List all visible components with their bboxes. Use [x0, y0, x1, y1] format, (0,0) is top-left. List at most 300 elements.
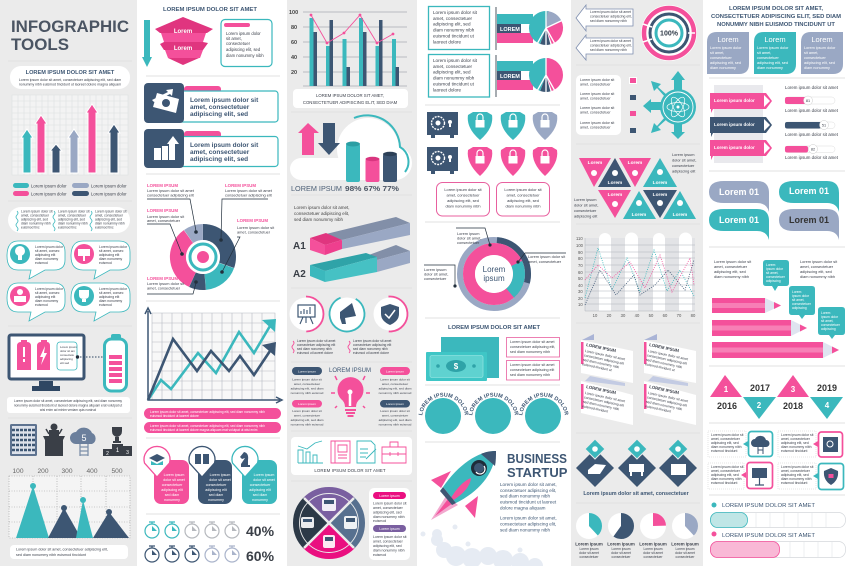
tilted card four: Lorem ipsum dolor sit amet — [648, 391, 688, 403]
triangle chart: 200 — [37, 468, 49, 475]
text block: pencils left: Lorem ipsum dolor sit — [714, 259, 752, 264]
panel: transport legend: euismod — [373, 519, 386, 523]
card: lavender one: sit amet, — [710, 51, 724, 55]
tilted card three: euismod tincidunt — [582, 404, 608, 414]
donut label: top left: consectetuer adipiscing elit — [147, 192, 195, 198]
text box with teal border two — [428, 54, 490, 97]
pencil three — [712, 342, 839, 358]
icon note: cloud: euismod tincidunt — [711, 449, 737, 453]
panel: transport legend: Lorem ipsum — [379, 527, 400, 531]
text block: pencils left: adipiscing elit, sed — [714, 269, 746, 274]
text block: startup copy: euismod tincidunt ut laoreet — [500, 500, 557, 504]
triangle chart: 500 — [111, 468, 123, 475]
card: teal — [754, 32, 796, 74]
text block: triangle chart caption — [10, 545, 128, 559]
text box with teal border one: amet, consectetuer — [433, 16, 473, 21]
callouts around bulb: nonummy nibh euismod — [379, 391, 412, 395]
callouts around bulb: nonummy nibh euismod — [291, 422, 324, 426]
panel: atom list: Lorem ipsum dolor sit — [580, 92, 614, 96]
panel: transport legend: Lorem ipsum dolor sit — [373, 502, 406, 506]
pink note two: adipiscing elit, sed — [507, 198, 539, 203]
progress: teal: LOREM IPSUM DOLOR SIT AMET — [722, 503, 816, 509]
panel: transport legend — [369, 488, 410, 560]
tilted card one: LOREM IPSUM — [586, 342, 617, 353]
card: lavender one — [707, 32, 749, 74]
donut label: middle left: LOREM IPSUM — [147, 208, 178, 213]
tilted card two: sed diam nonummy nibh — [646, 358, 683, 369]
timeline: 2016 — [717, 401, 737, 411]
bubble: pink person: Lorem ipsum dolor — [35, 287, 64, 291]
dotted line chart: 110 — [576, 236, 583, 241]
dotted line chart: 40 — [578, 283, 583, 288]
bubble: pink person: diam nonummy — [35, 299, 58, 303]
chart legend: Lorem ipsum dolor — [91, 184, 127, 188]
card: lavender one: diam nonummy — [710, 66, 736, 70]
mini pie three: Lorem ipsum — [639, 542, 667, 546]
bar: A2: A2 — [293, 269, 306, 280]
card: lavender two: Lorem — [811, 35, 833, 44]
monitor with batteries — [9, 335, 84, 391]
callouts around bulb: Lorem ipsum — [298, 370, 316, 374]
ribbon arrows: Lorem ipsum dolor — [714, 122, 755, 127]
ring icon: shield — [371, 295, 409, 333]
dotted line chart: 80 — [578, 256, 583, 261]
bubble label three — [709, 209, 769, 240]
callouts around bulb: Lorem ipsum dolor sit — [380, 378, 410, 382]
icon note: shield: Lorem ipsum dolor sit — [781, 465, 813, 469]
tilted card four: sed diam nonummy nibh — [646, 400, 683, 411]
teal tooltip three: sit amet, — [821, 319, 834, 323]
pink note box two — [506, 360, 560, 380]
text block: startup copy: consectetuer adipiscing elit, — [500, 488, 556, 493]
arrow: navy down — [318, 123, 340, 155]
target 100 percent: 100% — [660, 30, 679, 38]
callouts around bulb: amet, consectetuer — [382, 382, 408, 386]
chart legend: Lorem ipsum dolor — [31, 192, 67, 196]
pin card: chess knight — [232, 446, 277, 504]
pin card: graduation: adipiscing elit — [161, 488, 183, 492]
icon note: cloud — [708, 431, 772, 457]
pin card: chess knight: consectetuer — [250, 483, 271, 487]
panel: oval notes: diam nonummy nibh — [58, 222, 88, 226]
timeline: 2018 — [783, 401, 803, 411]
callouts around bulb: nonummy nibh euismod — [291, 391, 324, 395]
text block: ring notes: Lorem ipsum dolor sit amet — [353, 339, 392, 343]
progress: pink: LOREM IPSUM DOLOR SIT AMET — [722, 533, 816, 539]
donut note: right — [528, 254, 566, 264]
pink note box one: consectetuer adipiscing elit, — [510, 345, 555, 349]
tilted card two: consectetuer adipiscing elit — [647, 353, 687, 366]
callouts around bulb: Lorem ipsum dolor sit — [292, 409, 322, 413]
text block: startup copy: sed diam nonummy nibh — [500, 528, 550, 532]
progress: pink — [710, 532, 846, 558]
cloud stats — [291, 184, 399, 193]
arrow note two: sed diam nonummy nibh — [590, 48, 627, 52]
stat: 60 percent: 60% — [246, 548, 275, 564]
callouts around bulb: amet, consectetuer — [382, 414, 408, 418]
circle with arc text three: LOREM IPSUM DOLOR — [518, 392, 568, 416]
bubble label two — [779, 181, 839, 212]
icon: briefcase — [382, 442, 406, 463]
pin card: chess knight: sed diam — [253, 493, 267, 497]
ribbon arrows: Lorem ipsum dolor — [714, 145, 755, 150]
progress bars: Lorem ipsum dolor sit amet — [785, 108, 839, 113]
dotted line chart: 30 — [578, 289, 583, 294]
donut label: bottom: LOREM IPSUM — [147, 276, 178, 281]
tilted card one — [581, 334, 633, 383]
text block: startup copy: Lorem ipsum dolor sit amet, — [500, 516, 557, 520]
ring icon: presentation — [288, 296, 324, 332]
shields row teal — [468, 112, 557, 140]
arrow note one: Lorem ipsum dolor sit amet — [590, 10, 631, 14]
bubble: pink board: sit amet, consec — [99, 249, 124, 253]
bubble label two: Lorem 01 — [789, 186, 829, 196]
circle with arc text one — [418, 392, 468, 434]
bubble label three: Lorem 01 — [719, 215, 759, 225]
text block: triangles left — [574, 197, 598, 218]
dotted line chart: 70 — [578, 263, 583, 268]
panel: atom list: amet, consectetuer — [580, 126, 611, 130]
text block: pencils left: amet, consectetuer — [714, 264, 748, 269]
callouts around bulb: Lorem ipsum dolor sit — [292, 378, 322, 382]
bubble: teal tree: Lorem ipsum dolor — [35, 245, 64, 249]
triangle mosaic: Lorem — [653, 192, 667, 198]
ribbon pie one — [496, 7, 563, 97]
heading: light bulb: LOREM IPSUM — [329, 368, 371, 374]
icon note: safe — [778, 431, 842, 457]
panel: oval notes: amet, consectetuer — [21, 214, 50, 218]
donut note: right: amet, consectetuer — [528, 259, 562, 264]
triangle mosaic: Lorem — [588, 160, 602, 166]
bubble label one — [709, 181, 769, 212]
text block: ring notes — [292, 339, 392, 355]
text box with teal border one: laoreet dolore — [433, 40, 462, 44]
text block: monitor caption: wisi enim ad minim veniam quis nostrud — [40, 408, 96, 412]
note box: sit amet, — [226, 36, 242, 41]
mini pie four: dolor sit amet — [675, 551, 695, 555]
callouts around bulb — [291, 367, 412, 426]
text block: A bars: Lorem ipsum dolor sit amet, — [294, 205, 350, 210]
donut label: top right: LOREM IPSUM — [225, 183, 256, 188]
caption: diamonds: Lorem ipsum dolor sit amet, consectetuer — [583, 491, 689, 497]
bar chart: 60 — [291, 40, 297, 46]
tilted card three: sed diam nonummy nibh — [583, 400, 620, 411]
cloud stats: LOREM IPSUM — [291, 184, 342, 193]
dotted line chart: 30 — [621, 313, 626, 318]
pin card: graduation: sed diam — [165, 493, 179, 497]
bar: A1 — [293, 217, 410, 255]
text block: triangles right: Lorem ipsum — [672, 152, 694, 157]
icon: safe two — [427, 147, 458, 174]
panel: transport legend: Lorem ipsum — [379, 494, 400, 498]
mini pie one: Lorem ipsum — [579, 547, 599, 551]
text block: triangles left: Lorem ipsum — [574, 197, 596, 202]
icon note: board: diam nonummy nibh — [711, 477, 742, 481]
icon note: board — [708, 462, 772, 489]
mini pie four — [671, 513, 699, 559]
panel: oval notes: adipiscing elit, sed — [58, 218, 85, 222]
card: lavender two: sit amet, — [804, 51, 818, 55]
bar chart — [289, 10, 407, 86]
progress bars: 82 — [811, 148, 815, 152]
panel: oval notes: amet, consectetuer — [58, 214, 87, 218]
teal tooltip three: consectetuer — [821, 323, 841, 327]
pink note box one: sed diam nonummy nibh — [510, 350, 550, 354]
text block: ring notes: euismod ut laoreet dolore — [297, 351, 333, 355]
arrow note two: Lorem ipsum dolor sit amet — [590, 39, 631, 43]
speech bubbles — [7, 241, 130, 321]
tilted card two: LOREM IPSUM — [649, 342, 680, 353]
text block: triangles left: adipiscing elit — [574, 214, 598, 218]
card: teal: diam nonummy — [757, 66, 783, 70]
teal tooltip two: consectetuer — [792, 302, 812, 306]
timeline: 1 — [724, 385, 729, 394]
icon: winners podium: 3 — [126, 450, 129, 456]
panel: oval notes: diam nonummy nibh — [95, 222, 125, 226]
arrow: teal down — [142, 20, 152, 67]
mini pie three: Lorem ipsum — [643, 547, 663, 551]
panel: money row: adipiscing elit, sed — [190, 111, 248, 118]
triangle mosaic: Lorem — [632, 212, 646, 218]
arrow note one: sed diam nonummy nibh — [590, 19, 627, 23]
smoke cloud — [420, 524, 543, 566]
dotted line chart: 60 — [663, 313, 668, 318]
icon note: safe: diam nonummy nibh — [781, 445, 812, 449]
bubble: teal tree: diam nonummy — [35, 257, 58, 261]
tilted card one: consectetuer adipiscing elit — [584, 353, 624, 366]
text block: startup copy: sed diam nonummy nibh — [500, 494, 550, 498]
panel: atom list — [576, 75, 621, 135]
panel: chart heading: nonummy nibh euismod tincidunt ut laoreet dolore magna aliquam — [19, 82, 121, 86]
teal tooltip one: sit amet, — [766, 271, 779, 275]
text block: startup copy: dolore magna aliquam — [500, 506, 546, 510]
ribbon pie one: LOREM — [500, 27, 520, 33]
text block: triangle chart caption: Lorem ipsum dolor sit amet, consectetuer adipiscing elit, — [16, 548, 108, 552]
dotted line chart: 20 — [578, 296, 583, 301]
panel: money row: amet, consectetuer — [190, 104, 250, 111]
bubble label four — [779, 209, 839, 240]
chart legend: Lorem ipsum dolor — [91, 192, 127, 196]
text box with teal border two: adipiscing elit, sed — [433, 70, 471, 74]
note box: Lorem ipsum dolor — [226, 31, 261, 36]
icon note: safe: amet, consectetuer — [781, 437, 811, 441]
pencil two — [712, 320, 807, 336]
text block: ring notes: euismod ut laoreet dolore — [353, 351, 389, 355]
pin card: graduation: dolor sit amet — [163, 478, 185, 482]
circle with arc text two — [468, 392, 518, 434]
tilted card two: Lorem ipsum dolor sit amet — [648, 349, 688, 361]
triangle mosaic — [579, 158, 696, 219]
pink note one — [436, 182, 490, 216]
dotted line chart: 90 — [578, 250, 583, 255]
text box with teal border two: Lorem ipsum dolor sit — [433, 58, 478, 63]
progress bars: Lorem ipsum dolor sit amet — [785, 85, 839, 90]
icon: winners podium: 2 — [106, 451, 109, 457]
mini pie three: dolor sit amet — [643, 551, 663, 555]
bubble: pink person: adipiscing elit — [35, 295, 55, 299]
card: lavender one: Lorem ipsum dolor — [710, 46, 742, 50]
icon note: safe: euismod tincidunt — [781, 449, 807, 453]
text box with teal border one: adipiscing elit, sed — [433, 22, 471, 26]
pin card: chess knight: dolor sit amet — [253, 478, 275, 482]
pink note one: Lorem ipsum dolor sit — [444, 187, 483, 192]
pill: note one: euismod tincidunt ut laoreet dolore — [150, 414, 199, 418]
panel: oval notes: adipiscing elit, sed — [95, 218, 122, 222]
mini pie four: Lorem ipsum — [675, 547, 695, 551]
panel: atom list: Lorem ipsum dolor sit — [580, 106, 614, 110]
dotted line chart: 50 — [578, 276, 583, 281]
tilted card three: LOREM IPSUM — [586, 384, 617, 395]
tilted card three: consectetuer adipiscing elit — [584, 395, 624, 408]
bubble: pink person — [7, 283, 65, 321]
icon: banknotes — [426, 337, 499, 381]
text block: triangles right: adipiscing elit — [672, 168, 696, 174]
donut note: top: Lorem ipsum — [457, 231, 480, 236]
card: teal: consectetuer — [757, 56, 779, 60]
card: lavender two: Lorem ipsum dolor — [804, 46, 836, 50]
progress bars: 51 — [822, 124, 826, 128]
callouts around bulb: Lorem ipsum — [386, 370, 404, 374]
donut note: right: Lorem ipsum dolor sit — [528, 254, 566, 259]
text box with teal border two: laoreet dolore — [433, 88, 462, 92]
donut label: bottom — [147, 276, 185, 290]
timeline: 3 — [791, 385, 796, 394]
text block: triangle chart caption: sed diam nonummy nibh euismod tincidunt — [16, 553, 86, 557]
arrow note one: consectetuer adipiscing elit, — [590, 14, 632, 18]
big battery — [104, 334, 126, 391]
panel: chart heading — [10, 66, 130, 89]
bubble: teal tree: adipiscing elit — [35, 253, 55, 257]
teal tooltip one: adipiscing — [766, 279, 781, 283]
donut label: middle right: Lorem ipsum dolor sit — [237, 225, 275, 230]
heading: column six: NONUMMY NIBH EUISMOD TINCIDUNT UT — [717, 22, 836, 28]
donut label: top left — [147, 183, 195, 198]
monitor with batteries: adipiscing — [60, 357, 73, 361]
teal tooltip two: sit amet, — [792, 298, 805, 302]
panel: growth row: amet, consectetuer — [190, 149, 250, 156]
stacked pink layers — [155, 17, 213, 65]
panel: bar chart caption — [293, 89, 408, 108]
icon note: cloud: amet, consectetuer — [711, 437, 741, 441]
teal tooltip one: Lorem — [766, 263, 776, 267]
card: lavender two: diam nonummy — [804, 66, 830, 70]
tilted card four: euismod tincidunt — [645, 404, 671, 414]
bubble: teal trophy: sit amet, consec — [99, 291, 124, 295]
tilted card one: euismod tincidunt ut — [582, 362, 612, 372]
ribbon arrows — [710, 85, 772, 163]
pie: transport quarters — [300, 494, 358, 552]
donut note: left: consectetuer — [424, 276, 447, 281]
progress bars — [785, 85, 839, 160]
text block: triangles right: consectetuer — [672, 163, 695, 168]
bubble: teal tree: euismod — [35, 261, 48, 265]
pin card: book: consectetuer — [206, 483, 227, 487]
pill: note two — [144, 422, 281, 433]
bubble label four: Lorem 01 — [789, 215, 829, 225]
tilted card four — [644, 376, 696, 425]
icon note: board: adipiscing elit, sed — [711, 473, 739, 477]
triangle chart — [9, 468, 130, 538]
text block: monitor caption — [7, 397, 130, 413]
icon: winners podium: 1 — [116, 448, 120, 454]
circle with arc text three — [518, 392, 568, 434]
panel: money row: Lorem ipsum dolor sit — [190, 97, 259, 104]
text block: ring notes: Lorem ipsum dolor sit amet — [297, 339, 336, 343]
icon note: cloud: diam nonummy nibh — [711, 445, 742, 449]
panel: chart heading: LOREM IPSUM DOLOR SIT AMET — [26, 70, 115, 76]
icon note: shield: diam nonummy nibh — [781, 477, 812, 481]
teal tooltip two: Lorem — [792, 290, 802, 294]
text box with teal border one: diam nonummy nibh — [433, 28, 475, 32]
cloud stats: 98% 67% 77% — [345, 184, 399, 193]
pin card: book: dolor sit amet — [209, 478, 231, 482]
donut chart — [147, 199, 268, 294]
tilted card four: consectetuer adipiscing elit — [647, 395, 687, 408]
dotted line chart: 60 — [578, 270, 583, 275]
donut label: top right: Lorem ipsum dolor sit amet — [225, 188, 273, 193]
timeline: 2017 — [750, 383, 770, 393]
teal tooltip two: adipiscing — [792, 306, 807, 310]
bar: A1: A1 — [293, 241, 306, 252]
icon note: safe: Lorem ipsum dolor sit — [781, 433, 813, 437]
text box with teal border two: euismod tincidunt ut — [433, 82, 475, 86]
icon: safe one — [427, 112, 458, 138]
bubble: teal trophy — [71, 283, 130, 321]
tilted card one: sed diam nonummy nibh — [583, 358, 620, 369]
tilted card four: LOREM IPSUM — [649, 384, 680, 395]
text block: startup copy: Lorem ipsum dolor sit amet, — [500, 482, 557, 487]
teal tooltip three: ipsum dolor — [821, 315, 839, 319]
triangle chart: 100 — [12, 468, 24, 475]
card: teal: Lorem — [764, 35, 786, 44]
donut label: top right: consectetuer adipiscing elit — [225, 192, 273, 198]
target 100 percent — [641, 5, 697, 61]
mini pie one: dolor sit amet — [579, 551, 599, 555]
timeline: 4 — [825, 401, 830, 410]
text block: triangles left: consectetuer — [574, 208, 597, 213]
bubble: teal trophy: Lorem ipsum dolor — [99, 287, 128, 291]
chart legend: Lorem ipsum dolor — [31, 184, 67, 188]
diamond icons — [576, 439, 697, 487]
callouts around bulb: adipiscing elit, sed diam — [291, 386, 324, 390]
heading: column six: CONSECTETUER ADIPISCING ELIT, SED DIAM — [711, 14, 841, 20]
bubble: teal trophy: euismod — [99, 303, 112, 307]
bubble: pink board: euismod — [99, 261, 112, 265]
pin card: book: nonummy — [208, 498, 224, 502]
note box: consectetuer — [226, 41, 251, 46]
callouts around bulb: Lorem ipsum — [386, 402, 404, 406]
panel: transport legend: amet, consectetuer — [373, 506, 404, 510]
donut label: top right — [225, 183, 273, 198]
rocket — [431, 451, 496, 520]
stacked pink layers: Lorem — [174, 46, 192, 52]
cloud storage — [290, 115, 412, 182]
icon note: shield: amet, consectetuer — [781, 469, 811, 473]
icon: banknotes: $ — [454, 362, 459, 371]
monitor with batteries: consectetu — [60, 353, 74, 357]
bubble: teal tree: sit amet, consec — [35, 249, 60, 253]
text block: triangles right — [672, 152, 696, 174]
dotted line chart: 50 — [649, 313, 654, 318]
tilted card one: Lorem ipsum dolor sit amet — [585, 349, 625, 361]
chart legend — [13, 183, 127, 196]
text block: pencils right: Lorem ipsum dolor sit — [800, 259, 838, 264]
teal tooltip three — [818, 307, 845, 339]
panel: transport legend: adipiscing elit, sed — [373, 510, 402, 514]
progress bars: Lorem ipsum dolor sit amet — [785, 155, 839, 160]
stat: 40 percent: 40% — [246, 523, 275, 539]
panel: money row — [144, 83, 278, 123]
